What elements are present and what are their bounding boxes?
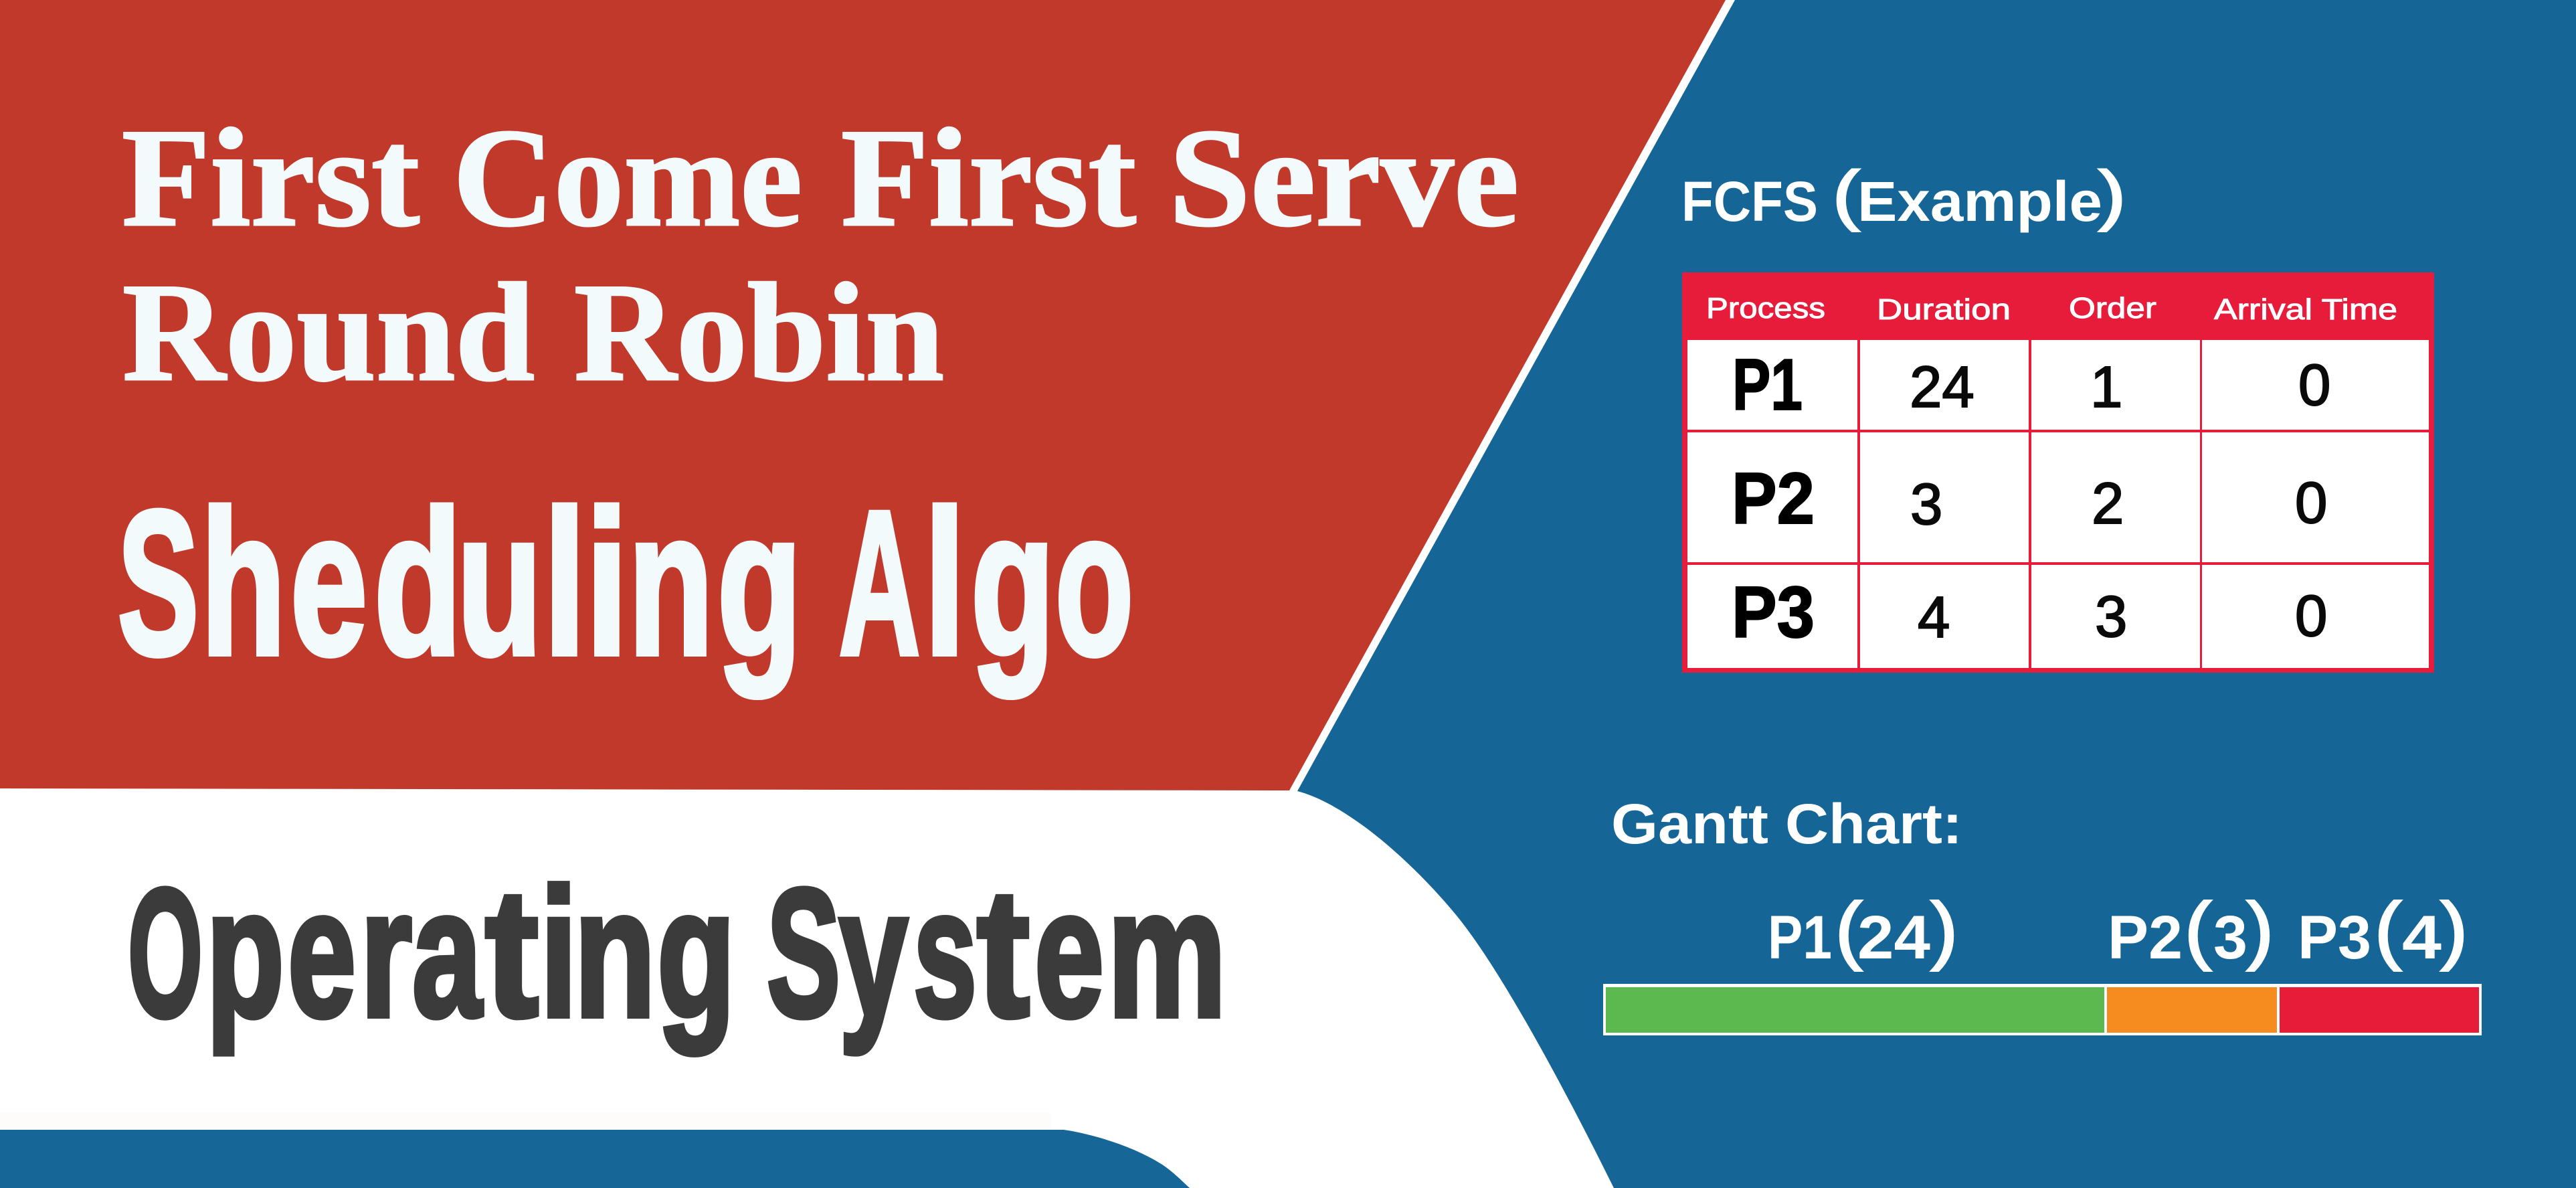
process names xyxy=(1732,344,1815,653)
table frame and header xyxy=(1682,272,2434,673)
panel: bottom blue band xyxy=(0,1130,1190,1188)
title: First Come First Serve: First xyxy=(841,100,1136,256)
heading: Sheduling Algo: S xyxy=(118,469,199,698)
heading: Operating System: y xyxy=(839,851,909,1056)
table cells xyxy=(1687,340,2429,668)
heading: Operating System: i xyxy=(540,851,577,1055)
gantt labels: ) xyxy=(2441,887,2468,971)
title: Round Robin: Robin xyxy=(574,255,944,410)
panel: red title area xyxy=(0,0,1726,790)
table header labels: Duration xyxy=(1877,293,2011,326)
heading: Operating System: e xyxy=(1034,851,1104,1055)
title: Round Robin: Round xyxy=(122,255,535,410)
gantt labels: ) xyxy=(1931,887,1958,971)
order values xyxy=(2090,355,2127,649)
gantt bar frame xyxy=(1603,984,2482,1035)
gantt labels: P1 xyxy=(1768,904,1832,972)
gantt labels: 4 xyxy=(2402,904,2442,972)
gantt segment P1 xyxy=(1606,987,2104,1033)
heading: Operating System: n xyxy=(574,851,656,1055)
order values: 3 xyxy=(2095,584,2127,649)
heading: Gantt Chart: Gantt Chart: xyxy=(1611,792,1962,855)
gantt labels: P2 xyxy=(2108,904,2183,972)
gantt labels: ( xyxy=(2185,887,2211,971)
table header labels xyxy=(1706,292,2397,326)
duration values: 3 xyxy=(1910,472,1942,537)
heading: Operating System: t xyxy=(977,851,1030,1055)
order values: 2 xyxy=(2092,471,2124,536)
heading: FCFS (Example): Example xyxy=(1857,170,2102,233)
title: First Come First Serve: First xyxy=(122,100,420,256)
heading: Sheduling Algo: e xyxy=(290,469,367,698)
heading: Sheduling Algo: g xyxy=(971,469,1054,699)
heading: FCFS (Example): ( xyxy=(1833,157,1859,232)
heading: Operating System: p xyxy=(206,851,284,1056)
table header labels: Order xyxy=(2069,292,2156,325)
heading: Operating System: s xyxy=(913,851,977,1055)
gantt segment P3 xyxy=(2280,987,2479,1033)
heading: Sheduling Algo: A xyxy=(839,469,920,698)
gantt labels: 3 xyxy=(2213,904,2247,972)
gantt labels: ( xyxy=(1835,887,1862,971)
gantt labels: P3 xyxy=(2298,904,2371,972)
process names: P3 xyxy=(1732,572,1815,653)
gantt chart xyxy=(1603,887,2482,1035)
heading: Operating System: m xyxy=(1107,851,1226,1055)
process names: P1 xyxy=(1732,344,1803,426)
arrival time values: 0 xyxy=(2298,353,2330,418)
heading: Sheduling Algo: l xyxy=(924,469,965,698)
heading: FCFS (Example): ) xyxy=(2099,157,2126,232)
arrival time values xyxy=(2295,353,2330,649)
heading: Operating System: S xyxy=(767,851,840,1055)
order values: 1 xyxy=(2090,355,2122,420)
title: First Come First Serve: Come xyxy=(453,100,802,256)
arrival time values: 0 xyxy=(2295,584,2327,649)
heading: Sheduling Algo: n xyxy=(628,469,713,698)
duration values xyxy=(1910,355,1974,650)
title: First Come First Serve: Serve xyxy=(1169,100,1519,256)
gantt segment P2 xyxy=(2107,987,2277,1033)
duration values: 4 xyxy=(1918,585,1950,650)
table header labels: Arrival Time xyxy=(2214,293,2397,326)
heading: Sheduling Algo: g xyxy=(717,469,802,699)
gantt labels: ) xyxy=(2247,887,2274,971)
panel: blue example area shape xyxy=(1297,0,2576,1188)
arrival time values: 0 xyxy=(2295,471,2327,535)
panel: off-white band above bottom strip xyxy=(0,1112,1050,1130)
gantt labels xyxy=(1768,887,2468,972)
heading: Operating System: r xyxy=(360,851,412,1055)
table header labels: Process xyxy=(1706,292,1825,325)
heading: Sheduling Algo: i xyxy=(585,469,628,698)
heading: Sheduling Algo: u xyxy=(457,469,542,698)
heading: Sheduling Algo: o xyxy=(1055,469,1133,698)
table: FCFS example xyxy=(1682,272,2434,673)
process names: P2 xyxy=(1732,458,1815,539)
heading: Sheduling Algo: d xyxy=(374,469,462,698)
heading: FCFS (Example): FCFS xyxy=(1681,170,1818,233)
duration values: 24 xyxy=(1910,355,1974,420)
heading: Sheduling Algo: l xyxy=(543,469,586,698)
gantt labels: ( xyxy=(2375,887,2401,971)
gantt labels: 24 xyxy=(1857,904,1930,972)
heading: Operating System: O xyxy=(128,851,203,1055)
heading: Operating System: a xyxy=(412,851,482,1055)
heading: Operating System: t xyxy=(485,851,539,1055)
heading: Operating System: e xyxy=(288,851,356,1055)
heading: Sheduling Algo: h xyxy=(201,469,286,698)
heading: Operating System: g xyxy=(657,851,735,1056)
